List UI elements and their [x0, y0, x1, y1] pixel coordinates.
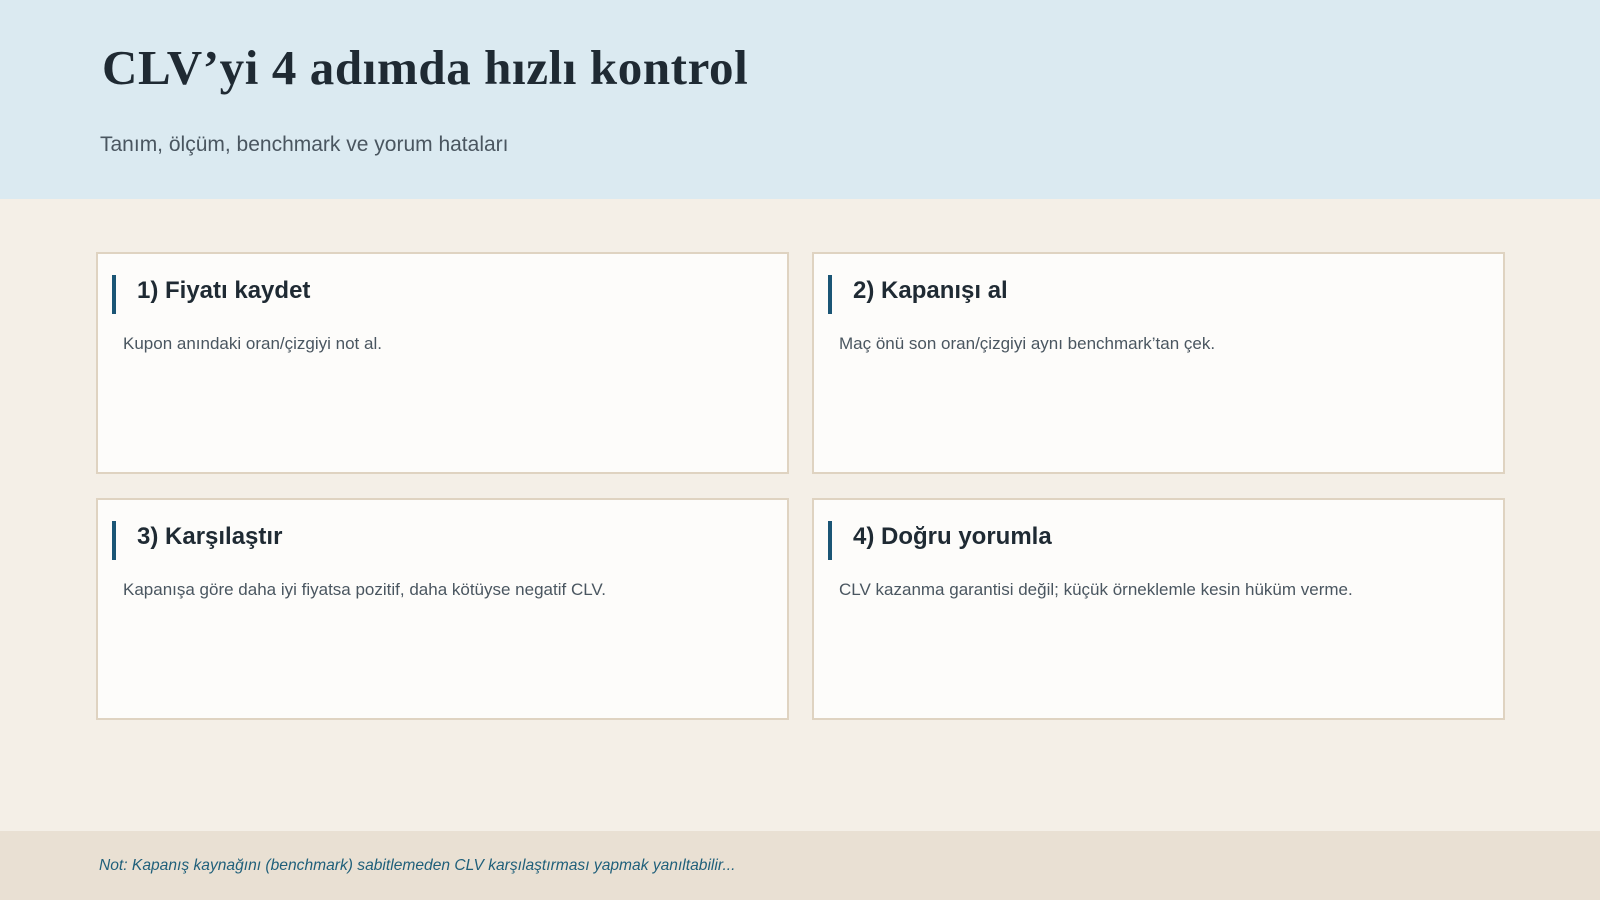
panel: step 1: Kupon anındaki oran/çizgiyi not al.: [123, 334, 382, 353]
panel: step 2: [812, 252, 1505, 474]
panel: step 3: 3) Karşılaştır: [137, 523, 282, 550]
footer note: [0, 831, 1600, 900]
title: CLV’yi 4 adımda hızlı kontrol: [102, 40, 748, 95]
panel: step 2: Maç önü son oran/çizgiyi aynı benchmark’tan çek.: [839, 334, 1215, 353]
panel: step 4: CLV kazanma garantisi değil; küçük örneklemle kesin hüküm verme.: [839, 580, 1353, 599]
panel: step 3: [96, 498, 789, 720]
footer note: Not: Kapanış kaynağını (benchmark) sabitlemeden CLV karşılaştırması yapmak yanıltabilir...: [99, 857, 735, 874]
panel: step 4: 4) Doğru yorumla: [853, 523, 1052, 550]
panel: step 2: 2) Kapanışı al: [853, 277, 1008, 304]
panel: step 1: [96, 252, 789, 474]
header: [0, 0, 1600, 199]
panel: step 3: Kapanışa göre daha iyi fiyatsa pozitif, daha kötüyse negatif CLV.: [123, 580, 606, 599]
panel: step 1: 1) Fiyatı kaydet: [137, 277, 310, 304]
subtitle: Tanım, ölçüm, benchmark ve yorum hataları: [100, 133, 508, 156]
panel: step 4: [812, 498, 1505, 720]
